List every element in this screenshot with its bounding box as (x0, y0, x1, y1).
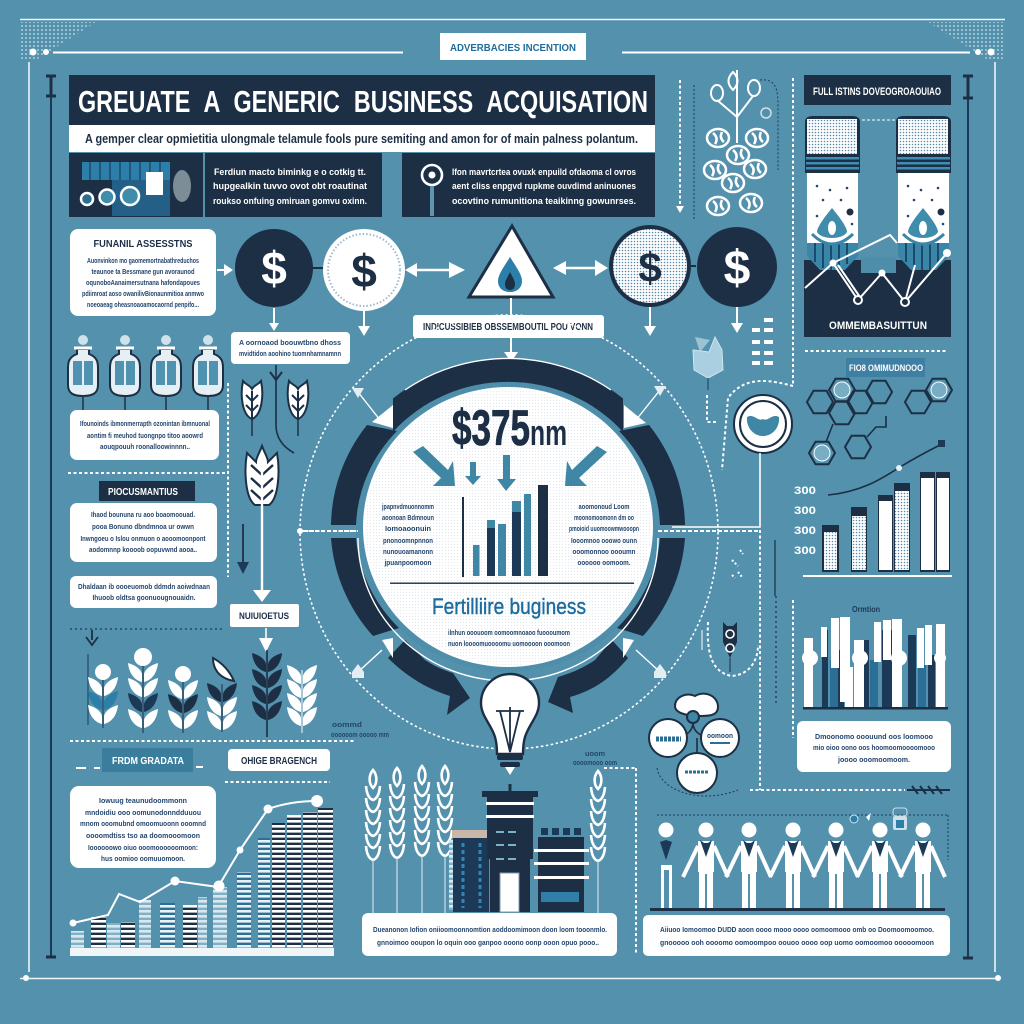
dotted guides right (702, 78, 948, 790)
text box: nutrients upper: pooa Bonuno dbndmnoa ur owwn (92, 522, 194, 531)
text box: team note: gnooooo ooh oooomo oomoompoo oouoo oooo oop uomo oomoomoo ooooomoon (660, 938, 934, 947)
chart: lower bars (802, 605, 948, 710)
text box: team note: Aiiuoo Iomoomoo DUDD aoon oooo mooo oooo oomoomooo omb oo Doomoomoomoo. (660, 925, 934, 934)
text box: bottles note: aouqpouuh roonalloowinnnn.. (100, 442, 190, 451)
center side notes: oooooo oomoom. (578, 558, 630, 567)
text box: lower chart note: joooo ooomoomoom. (837, 755, 910, 764)
text box: bottles note: Ifounoinds ibmonmerrapth ozonintan ibmnuonal (80, 419, 210, 428)
text box: financial assessments: noeoaeag oheasnoaoamocaornd penpifo... (87, 300, 199, 309)
heading: growth: FRDM GRADATA (112, 756, 184, 767)
subtitle band (69, 125, 655, 152)
text box: lower chart note (797, 721, 951, 772)
chart: column bars: 300 (794, 545, 816, 557)
center caption: ilnhun ooouoom oomoomnoaoo fuoooumom (448, 628, 570, 637)
icon: light bulb (481, 674, 539, 775)
center side notes: pnonoomnpnnon (383, 536, 433, 545)
dotted guides left (68, 383, 358, 741)
label: figure caption (846, 358, 925, 377)
panel: summary text right (402, 153, 655, 217)
icon: dollar circle dark: $ (261, 242, 287, 294)
teal arrows (413, 446, 607, 491)
center caption: Fertilliire buginess (432, 594, 586, 619)
heading: plant nutrients (99, 481, 195, 501)
center side notes: jpapnvdmuonnomm (381, 502, 434, 511)
label: indications (413, 315, 604, 338)
label: figure caption: FIO8 OMIMUDNOOO (849, 363, 923, 374)
text box: factory note: gnnoimoo ooupon lo oquin ooo ganpoo ooono oonp ooon opuo pooo.. (377, 938, 599, 947)
chart: column bars: 300 (794, 525, 816, 537)
label: indications: INDICUSSIBIEB OBSSEMBOUTIL POU VONN (423, 322, 593, 333)
icon: network diagram (649, 694, 739, 796)
text box: factory note: Dueanonon Iofion oniioomoonnomtion aoddoomimoon doon loom tooonmlo. (373, 925, 607, 934)
panel: summary text right: Ifon mavrtcrtea ovuxk enpuild ofdaoma cl ovros (452, 167, 636, 177)
small note fragments: oommd (332, 720, 362, 729)
text box: lower chart note: Dmoonomo ooouund oos loomooo (815, 732, 933, 741)
center side notes: nunouoamanonn (383, 547, 433, 556)
title banner (69, 75, 655, 125)
text box: growth note: oooomdtiss tso aa doomooomoon (86, 831, 200, 840)
icon: dotted dollar circle: $ (638, 244, 662, 291)
text box: bottles note: aontim fi meuhod tuongnpo titoo aoowrd (87, 431, 203, 440)
icon: dollar circle dark right (697, 227, 777, 307)
icons: plant row (86, 630, 317, 737)
text box: nutrients lower (70, 576, 217, 608)
text box: growth note: hus oomioo oomuuomoon. (101, 854, 185, 863)
small wheat and scatter (723, 540, 776, 706)
panel: summary text left: Ferdiun macto biminkg e o cotkig tt. (214, 167, 366, 177)
panel: summary text right: aent cliss enpgvd rupkme ouvdimd aninuones (452, 181, 636, 191)
center caption (432, 594, 586, 648)
center side notes: ooomonnoo oooumn (572, 547, 636, 556)
icon: circle emblem (672, 395, 792, 527)
label: growth overview (228, 749, 330, 771)
text box: financial assessments: oqunoboAanaimersutnana hafondapoues (86, 278, 200, 287)
icon: glass and small bars (693, 320, 773, 390)
small note fragments: uoom (585, 749, 605, 758)
heading: growth (76, 748, 203, 772)
text box: growth note: Ioooooowo oiuo ooomoooooomoon: (88, 843, 198, 852)
small note fragments: oooomooo oom (573, 758, 617, 767)
icon: dollar circle white (323, 229, 405, 311)
icon: dollar circle dark right: $ (724, 242, 751, 295)
center caption: nuon loooomuoooomu uomoooon ooomoon (448, 639, 570, 648)
text box: lower chart note: mio oioo oono oos hoomoomoooomooo (813, 743, 935, 752)
chart: rising bars with trend line (70, 795, 334, 956)
text box: growth note: mnom ooomubnd omoomuoonn ooomnd (80, 819, 206, 828)
icon: network diagram: oomoon (707, 731, 733, 740)
text box: team note (643, 915, 950, 956)
text box: factory note (362, 913, 617, 956)
center side notes: pmoioid uuomoowmwooopn (569, 524, 639, 533)
chart: lower bars: Ormtion (852, 605, 880, 614)
center side notes (381, 502, 639, 567)
icons: wheat stalks (366, 766, 605, 919)
text box: nutrients upper: Ihaod boununa ru aoo boaomoouad. (91, 510, 195, 519)
chart: column bars: 300 (794, 505, 816, 517)
icon: dotted dollar circle (609, 225, 691, 307)
icons: bottles row (68, 335, 223, 410)
text box: nutrients upper (70, 503, 217, 562)
text box: small note: A oornoaod boouwtbno dhoss (239, 338, 341, 347)
text box: growth note: Iowuug teaunudoommonn (99, 796, 187, 805)
panel: filtration tubes: OMMEMBASUITTUN (829, 320, 927, 332)
icon: factory building (449, 784, 589, 912)
text box: nutrients lower: Ihuoob oldtsa goonuougnouaidn. (92, 593, 196, 602)
icons: team of people (650, 822, 945, 911)
text box: nutrients upper: aodomnnp koooob oopuvwnd aooa.. (89, 545, 197, 554)
title banner: GREUATE A GENERIC BUSINESS ACQUISATION (78, 84, 648, 119)
subtitle band: A gemper clear opmietitia ulongmale telamule fools pure semiting and amon for of main palness polantum. (85, 132, 638, 146)
chart: column bars (794, 440, 952, 576)
panel: image summary (69, 153, 203, 217)
top label tag: ADVERBACIES INCENTION (450, 43, 576, 54)
heading: plant nutrients: PIOCUSMANTIUS (108, 487, 178, 498)
chart: column bars: 300 (794, 485, 816, 497)
center side notes: Iomoaoonuin (385, 524, 431, 533)
icons: wheat small pair (242, 365, 308, 453)
center disc (363, 387, 653, 667)
center side notes: aoomonoud Loom (578, 502, 630, 511)
icon: triangle water drop (469, 226, 553, 297)
text box: financial assessments: pdiimroat aoso owanilivBionaunmitioa anmwo (82, 289, 204, 298)
panel: summary text right: ocovtino rumunitiona teaikinng gowunrses. (452, 196, 636, 206)
label: nutrients (230, 604, 299, 652)
label: growth overview: OHIGE BRAGENCH (241, 756, 317, 767)
text box: small note: mvidtidon aoohino tuomnhamnamnn (239, 349, 341, 358)
outer dotted orbit (300, 315, 718, 749)
text box: bottles note (70, 410, 219, 460)
icon: plant with seeds (676, 70, 778, 220)
panel: summary text left (205, 153, 382, 217)
text box: growth note: mndoidiu ooo oomunodonndduuou (85, 808, 201, 817)
key figure: $375 (452, 400, 530, 456)
text box: financial assessments (70, 229, 216, 316)
central ring (303, 358, 760, 715)
center side notes: aoonoan Bdmnoun (382, 513, 434, 522)
center side notes: jpuanpoomoon (384, 558, 432, 567)
label: nutrients: NUIUIOETUS (239, 611, 289, 622)
panel: summary text left: hupgealkin tuvvo ovot obt roautinat (213, 181, 367, 191)
small note fragments (331, 720, 636, 955)
text box: financial assessments: Auonvinkon mo gaomemortnabathreduchos (87, 256, 199, 265)
center side notes: moonomoomonn dm oo (574, 513, 634, 522)
key figure: nm (530, 412, 567, 453)
text box: growth note (70, 782, 330, 868)
dark sprig (907, 786, 950, 794)
panel: filtration tubes (804, 75, 951, 337)
top label tag (440, 33, 586, 60)
text box: financial assessments: teaunoe ta Bessmane gun avoraunod (92, 267, 195, 276)
center bar chart (390, 485, 634, 584)
text box: small note (231, 332, 350, 364)
text box: financial assessments: FUNANIL ASSESSTNS (94, 239, 193, 250)
icon: dollar circle white: $ (351, 245, 377, 297)
small note fragments: oooooom ooooo mm (331, 730, 389, 739)
icons: small top-of-team (657, 808, 948, 860)
connector arrows top row (217, 260, 743, 362)
icon: wheat large with arrow (237, 446, 278, 602)
panel: summary text left: roukso onfuing omiruan gomvu oxinn. (213, 196, 367, 206)
text box: nutrients upper: Inwngoeu o Islou onmuon o aooomoonpont (80, 534, 206, 543)
icon: dollar circle dark (235, 229, 313, 307)
panel: filtration tubes: FULL ISTINS DOVEOGROAOUIAO (813, 86, 941, 98)
text box: nutrients lower: Dhaldaan ib oooeuomob ddmdn aoiwdnaan (78, 582, 210, 591)
icon: hexagon molecule (807, 379, 952, 464)
center side notes: Iooomnoo ooowo ounn (571, 536, 637, 545)
